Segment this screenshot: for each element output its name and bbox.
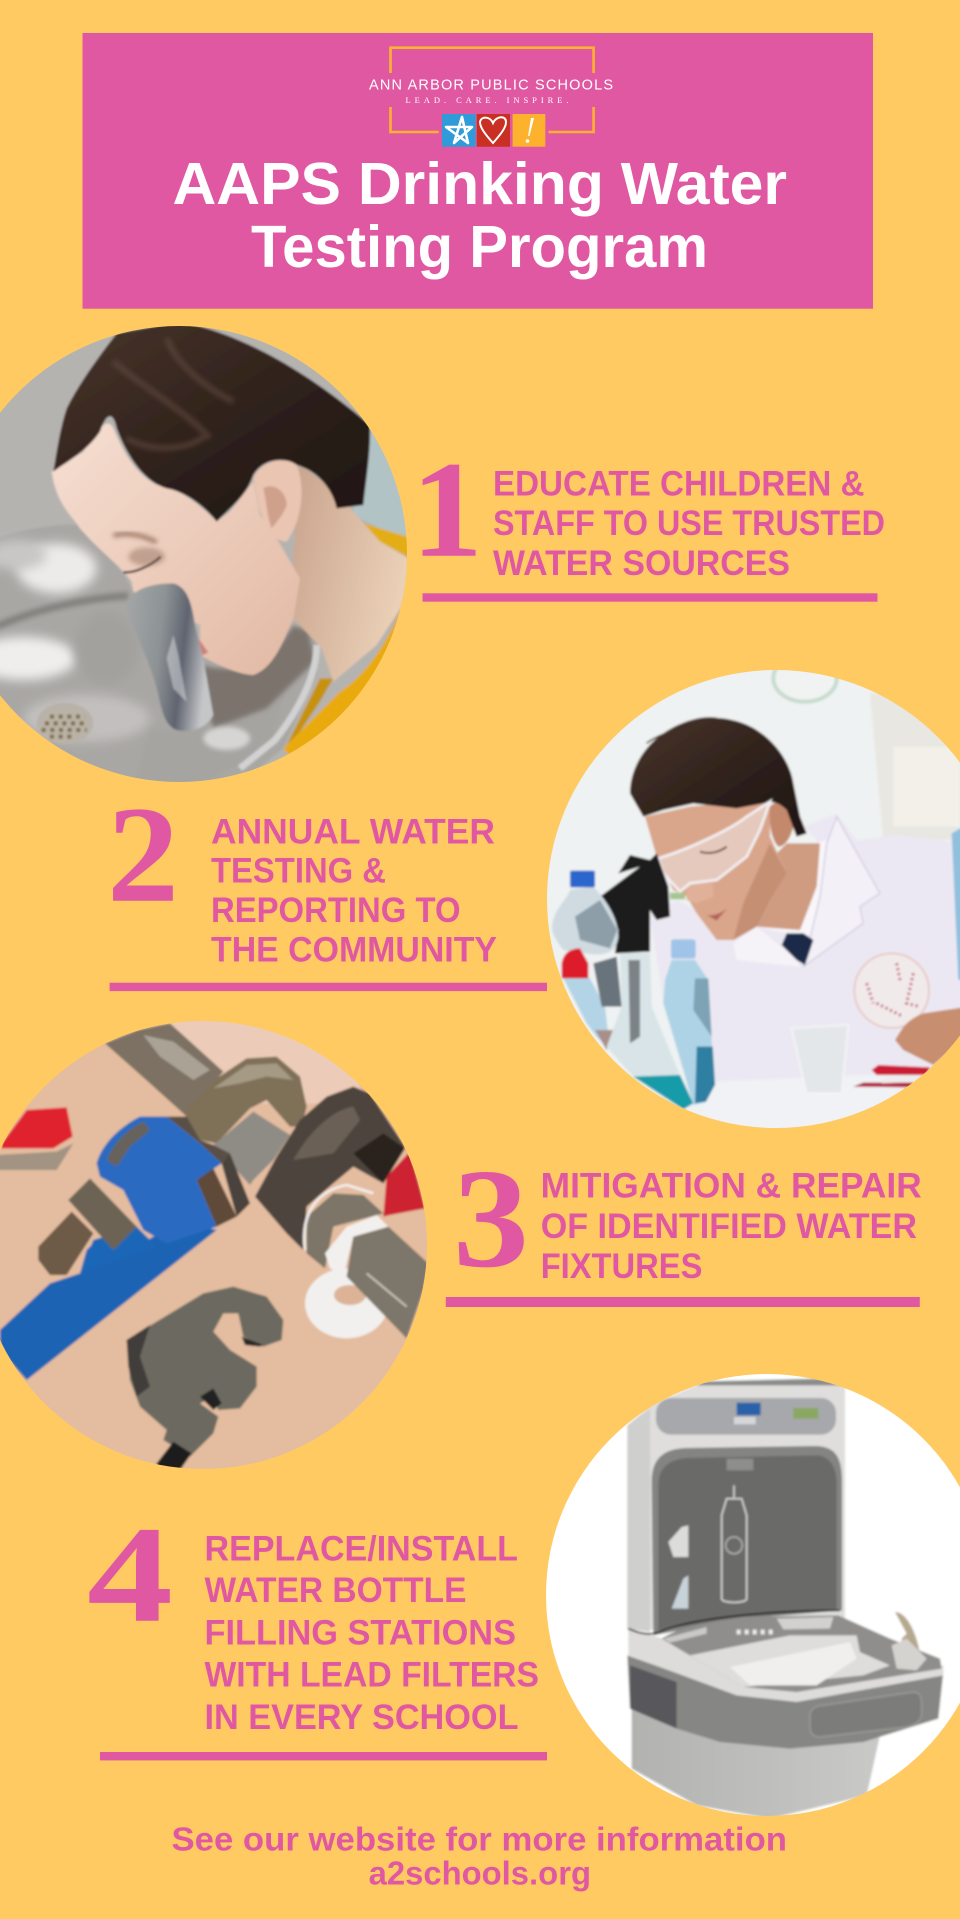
number 4: 4	[87, 1498, 173, 1651]
photo: child drinking from fountain	[0, 322, 430, 788]
step 4 text	[204, 1530, 539, 1737]
step 2	[107, 778, 547, 991]
step 4 text: IN EVERY SCHOOL	[204, 1698, 518, 1737]
step 4	[87, 1498, 547, 1760]
step 2 text: REPORTING TO	[211, 891, 460, 930]
step 4 text: FILLING STATIONS	[204, 1614, 516, 1652]
photo: scientist with microscope	[530, 655, 960, 1133]
footer text: a2schools.org	[369, 1855, 591, 1892]
step 3 text: FIXTURES	[541, 1247, 702, 1286]
photo: pipe wrenches	[0, 1017, 430, 1483]
number 2: 2	[107, 778, 179, 931]
school district logo: LEAD. CARE. INSPIRE.	[406, 95, 568, 105]
school district logo: ANN ARBOR PUBLIC SCHOOLS	[369, 77, 613, 93]
step 1 text: STAFF TO USE TRUSTED	[493, 504, 885, 543]
footer text: See our website for more information	[172, 1820, 787, 1857]
number 3: 3	[453, 1139, 529, 1297]
step 2 text: THE COMMUNITY	[211, 930, 497, 969]
step 3 text: MITIGATION & REPAIR	[541, 1167, 922, 1206]
step 3 text	[541, 1167, 922, 1286]
step 3	[446, 1139, 922, 1307]
step 2 text: TESTING &	[211, 852, 386, 891]
step 4 text: WITH LEAD FILTERS	[204, 1656, 539, 1694]
step 2 text	[211, 812, 497, 969]
title: AAPS Drinking Water	[172, 151, 787, 217]
step 4 text: WATER BOTTLE	[204, 1571, 466, 1610]
step 1 text	[493, 465, 885, 583]
school district logo	[369, 48, 613, 147]
step 1	[411, 433, 885, 602]
photo: bottle filling station	[530, 1369, 960, 1835]
step 3 text: OF IDENTIFIED WATER	[541, 1207, 917, 1246]
title: Testing Program	[251, 214, 708, 280]
step 2 text: ANNUAL WATER	[211, 812, 495, 851]
step 1 text: EDUCATE CHILDREN &	[493, 465, 864, 504]
title	[172, 151, 787, 280]
step 4 text: REPLACE/INSTALL	[204, 1530, 518, 1568]
step 1 text: WATER SOURCES	[493, 544, 790, 583]
number 1: 1	[411, 433, 483, 586]
footer text	[172, 1820, 787, 1892]
header panel	[82, 33, 873, 309]
